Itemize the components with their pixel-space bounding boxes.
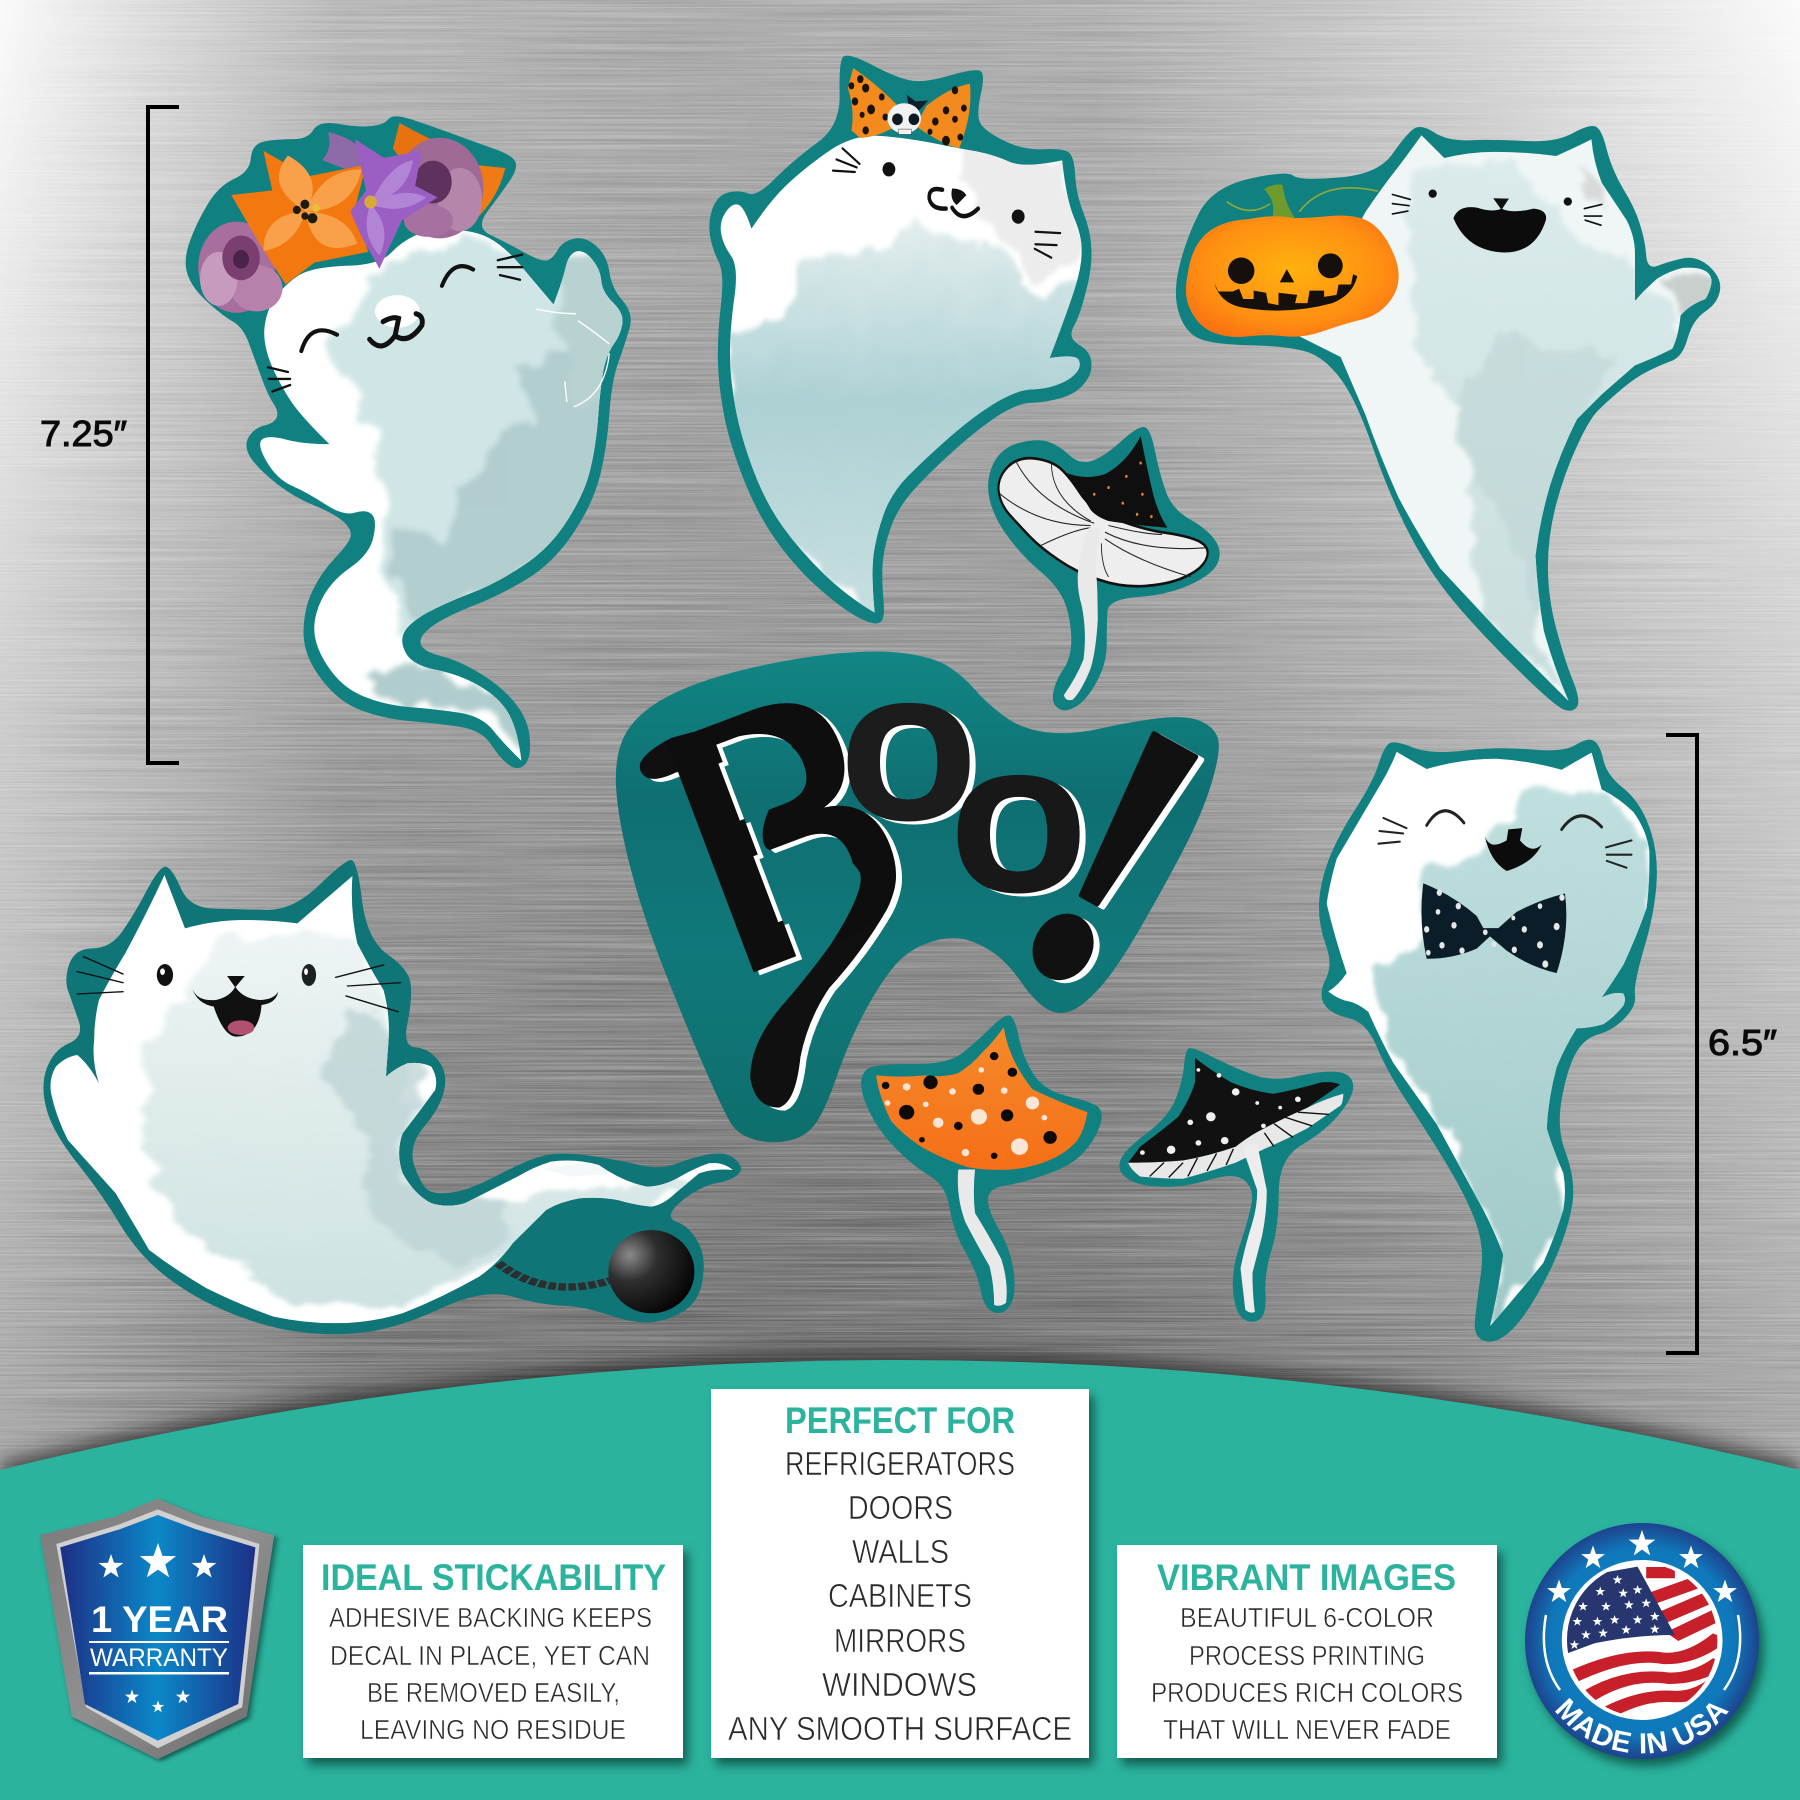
striped gills [1128,1094,1343,1179]
ghost cat with ball and chain [39,860,742,1334]
polka dot bow tie [1421,883,1566,973]
cap spots [882,1052,1057,1159]
height bracket 7.25 inches [40,107,179,763]
made in USA badge [1524,1523,1770,1772]
open-mouth cat face [77,957,400,1037]
surface list: MIRRORS [834,1622,966,1659]
warranty label: WARRANTY [90,1644,228,1672]
American flag [1560,1560,1732,1720]
exclamation mark: ! [961,638,1268,1071]
pumpkin [1186,184,1399,337]
body text: PROCESS PRINTING [1189,1640,1425,1671]
height bracket 6.5 inches [1666,735,1777,1353]
flower crown [198,123,505,313]
body text: BEAUTIFUL 6-COLOR [1180,1602,1434,1633]
wing highlights [333,309,609,512]
heading: VIBRANT IMAGES [1157,1557,1456,1598]
teal sticker border [1319,740,1657,1342]
black cap [1128,1058,1340,1163]
surface list: REFRIGERATORS [785,1445,1015,1482]
cat face [833,148,1060,258]
mushroom cap underside [998,458,1208,586]
surface list: ANY SMOOTH SURFACE [728,1710,1072,1747]
black spotted mushroom [1119,1048,1353,1322]
ghost cat with orange bow [701,56,1101,633]
teal sticker border [1119,1048,1353,1322]
warranty shield badge [40,1498,274,1759]
ghost cat with pumpkin [1176,125,1726,713]
mushroom black top [1064,436,1167,528]
first letter o: o [843,635,974,858]
surface list: DOORS [848,1489,953,1526]
orange cap [876,1027,1087,1170]
smiling cat face [1378,811,1632,871]
dimension label: 7.25″ [40,413,127,454]
badge stars [1547,1530,1737,1602]
warranty label: 1 YEAR [91,1599,228,1640]
warranty stars [99,1543,216,1712]
laughing cat face [1392,190,1602,253]
ghost body watercolor [260,230,623,761]
panel: ideal stickability [303,1545,683,1758]
body text: ADHESIVE BACKING KEEPS [329,1602,652,1633]
mushroom stem [1240,1144,1267,1313]
body text [1151,1602,1463,1745]
mushroom stem [1064,527,1101,700]
body text: PRODUCES RICH COLORS [1151,1677,1463,1708]
ghost cat with flower crown [186,116,647,782]
teal sticker border [1176,126,1720,711]
surface list: WINDOWS [822,1666,977,1703]
heading: IDEAL STICKABILITY [321,1557,666,1598]
orange spotted mushroom [861,1015,1102,1313]
surface list: WALLS [852,1533,949,1570]
teal sticker border [988,427,1220,710]
white mushroom with black cap [988,427,1220,710]
badge caption: MADE IN USA [1555,1698,1729,1754]
Boo lettering sticker [616,652,1219,1142]
ghost body watercolor [720,136,1082,612]
body text [329,1602,652,1745]
letter B: B [622,605,954,1051]
orange polka bow with skull [848,68,970,148]
mushroom stem [958,1170,1007,1306]
surface list [728,1445,1072,1747]
body text: DECAL IN PLACE, YET CAN [330,1640,650,1671]
body text: BE REMOVED EASILY, [367,1677,620,1708]
teal footer band [0,1352,1800,1800]
teal sticker border [861,1015,1102,1313]
teal sticker border [43,860,741,1334]
white cap dots [1140,1068,1301,1155]
ghost body watercolor [1326,752,1650,1326]
surface list: CABINETS [828,1577,972,1614]
word Boo! with white offset shadow [640,702,1204,1111]
body text: THAT WILL NEVER FADE [1163,1714,1451,1745]
warranty label [89,1599,229,1674]
ghost body watercolor [39,870,742,1330]
gill lines [998,461,1205,577]
badge side arcs [1544,1615,1740,1690]
smiling face [268,255,522,392]
heading: PERFECT FOR [785,1400,1015,1441]
B flourishes [640,732,896,1108]
body text: LEAVING NO RESIDUE [360,1714,626,1745]
teal blob background [616,652,1219,1142]
ghost cat with bow tie [1317,740,1670,1345]
teal sticker border [186,116,631,768]
panel: vibrant images [1117,1545,1497,1758]
ball and chain [498,1230,694,1313]
second letter o: o [953,707,1084,930]
panel: perfect for [711,1389,1089,1758]
ghost body watercolor [1291,125,1726,713]
dimension label: 6.5″ [1708,1022,1777,1063]
teal sticker border [709,56,1092,623]
